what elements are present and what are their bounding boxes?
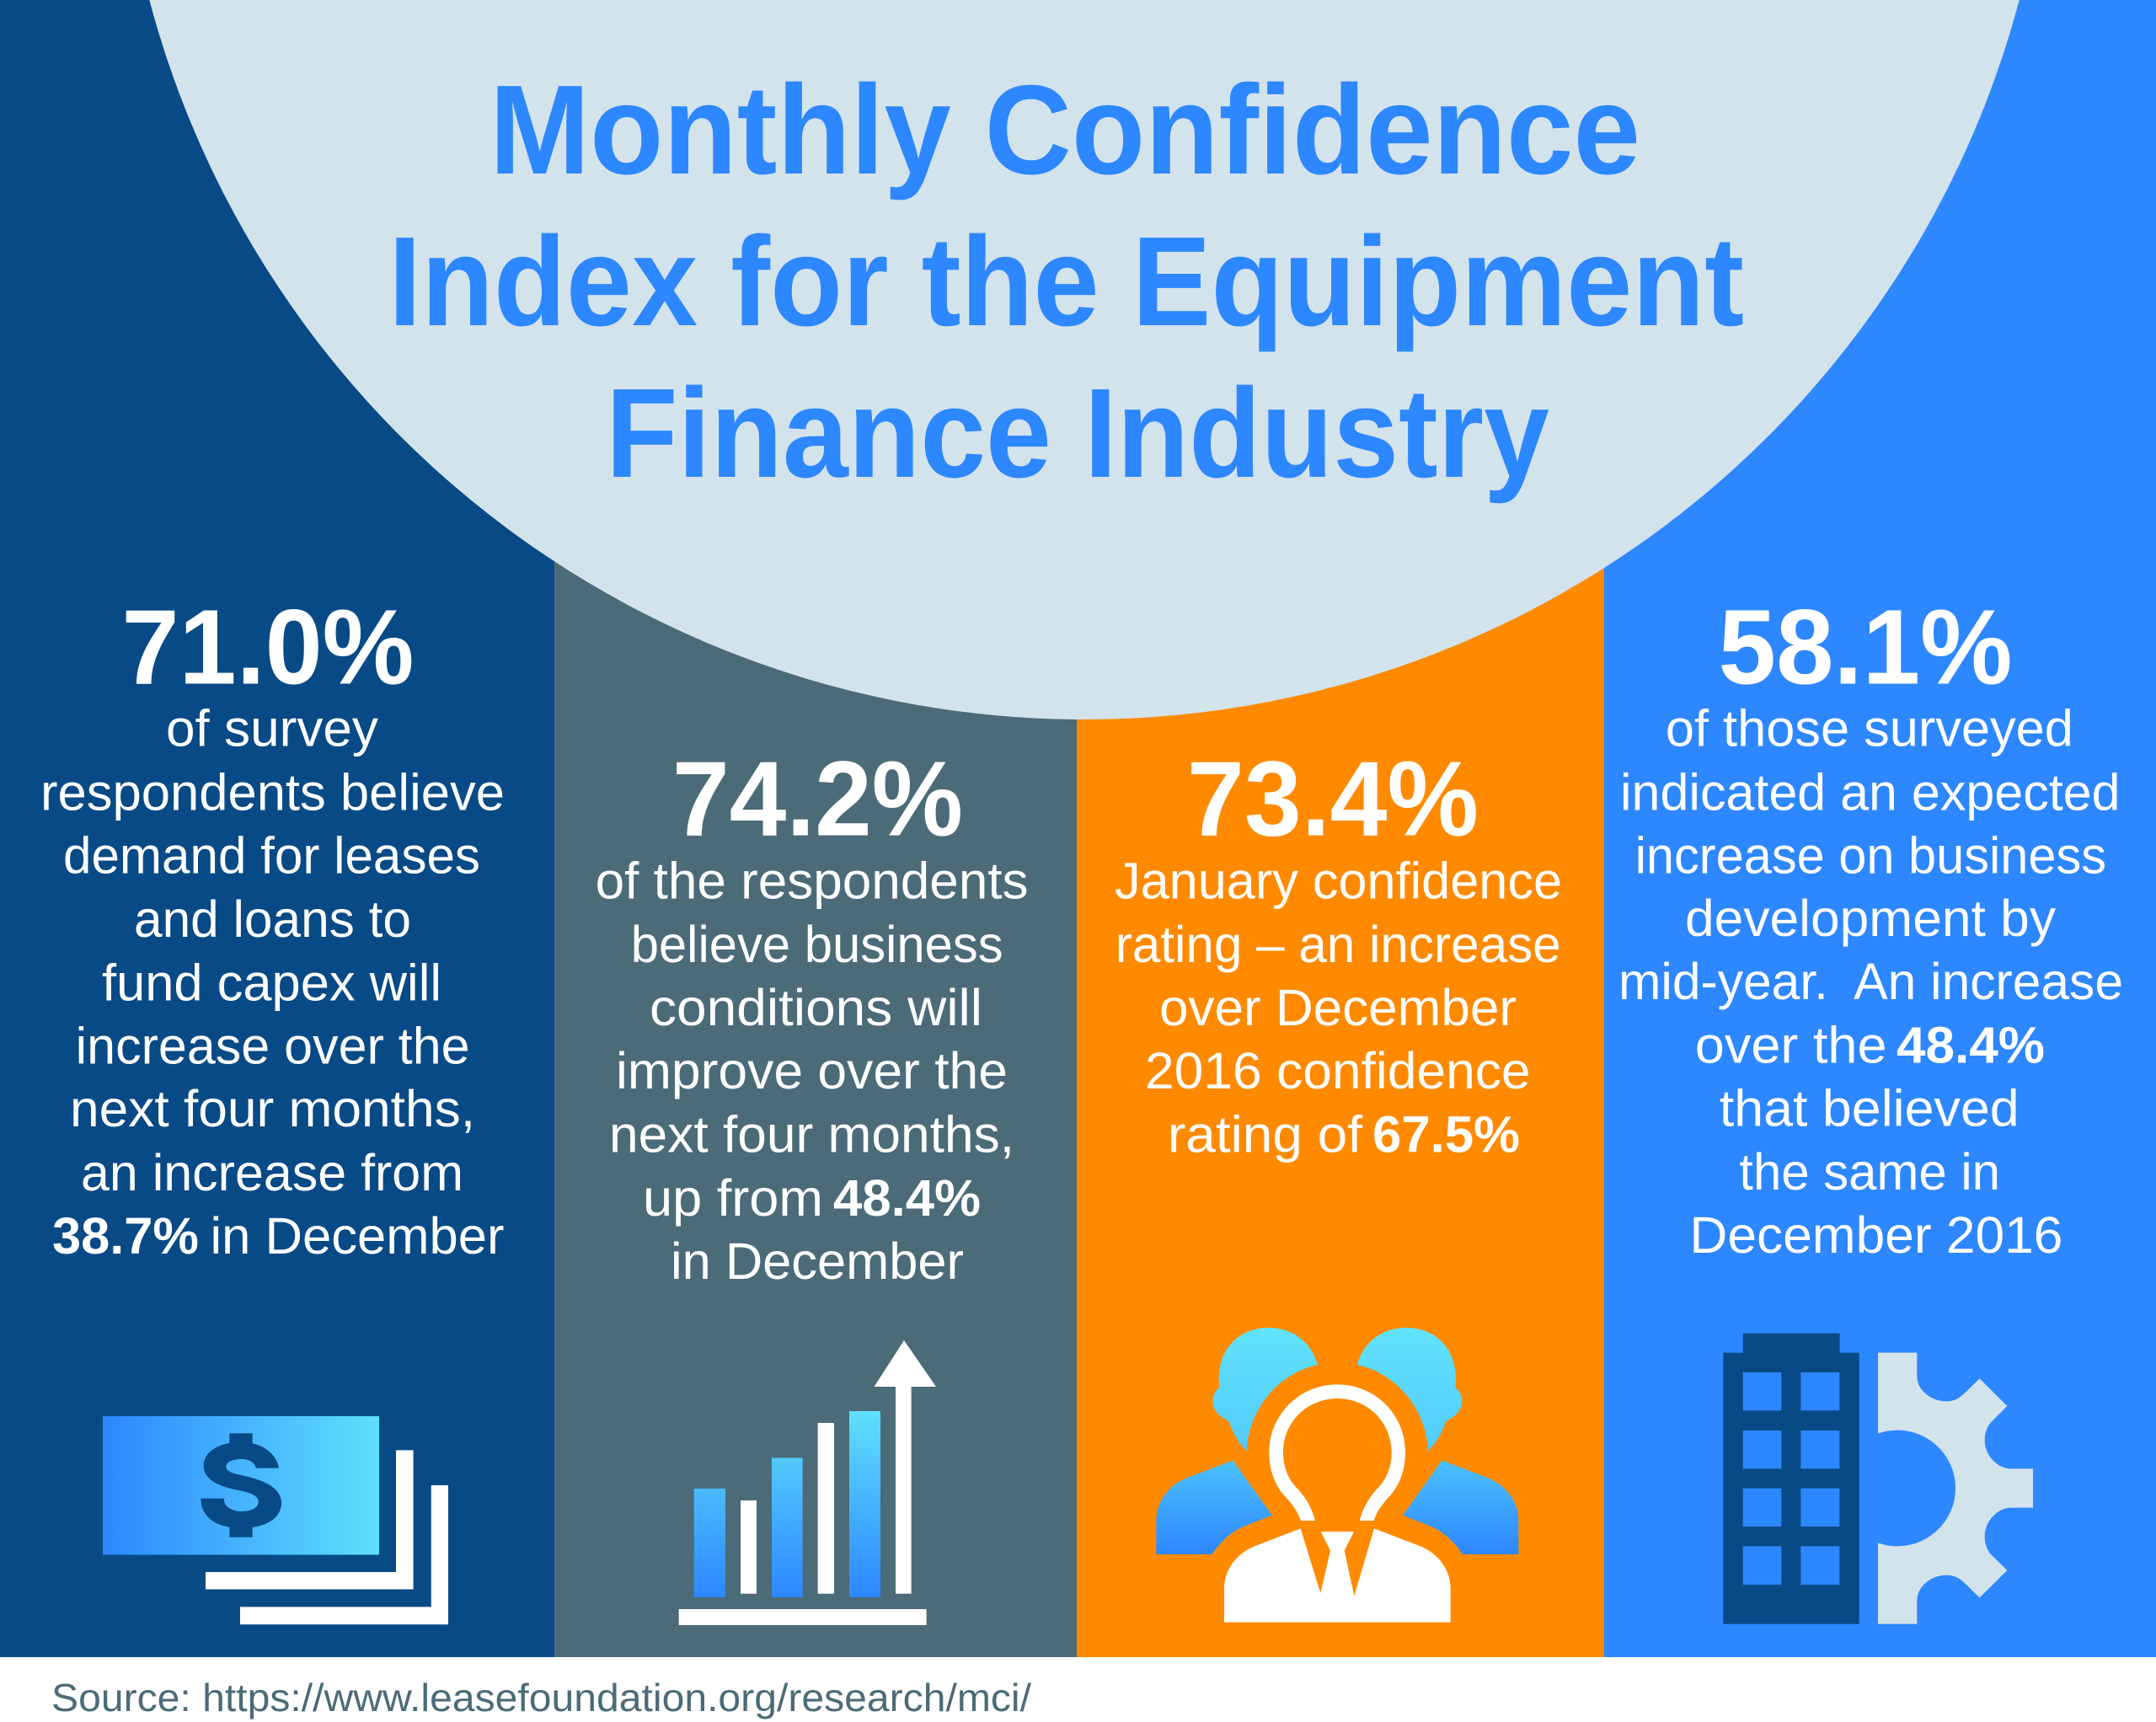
text block: business development description: that believed xyxy=(1720,1080,2020,1137)
text block: confidence rating description: 2016 confidence xyxy=(1145,1042,1531,1099)
text block: business development description: the same in xyxy=(1739,1143,2000,1201)
heading circle xyxy=(117,0,2052,719)
panel: demand for leases and loans xyxy=(0,0,554,1657)
text block: demand description: in December xyxy=(211,1207,504,1265)
text block: business development description: indicated an expected xyxy=(1620,763,2120,821)
text block: business conditions description: believe business xyxy=(631,916,1003,973)
panel: business conditions xyxy=(554,0,1077,1657)
text block: demand description: and loans to xyxy=(134,890,411,948)
text block: confidence rating description: 67.5% xyxy=(1372,1106,1520,1163)
text block: demand description: demand for leases xyxy=(63,827,480,885)
title: Finance Industry xyxy=(606,361,1549,504)
text block: confidence rating description xyxy=(1115,852,1562,1163)
panel: January confidence rating xyxy=(1077,0,1604,1657)
title xyxy=(388,58,1744,504)
text block: business conditions description: next four months, xyxy=(609,1106,1014,1163)
text block: business development description: 48.4% xyxy=(1897,1016,2045,1073)
text block: demand description: next four months, xyxy=(70,1080,475,1137)
text block: demand description: fund capex will xyxy=(102,954,441,1011)
icon: stacked dollar bills xyxy=(103,1416,448,1624)
stat: 58.1%: 58.1% xyxy=(1719,588,2012,707)
title: Monthly Confidence xyxy=(490,58,1640,201)
text block: business development description: over the xyxy=(1695,1016,1887,1073)
text block: demand description: of survey xyxy=(166,700,378,757)
text block: business development description: increase on business xyxy=(1635,827,2106,885)
text block: business development description: mid-year. An increase xyxy=(1618,953,2123,1010)
text block: confidence rating description: over December xyxy=(1159,979,1517,1036)
text block: demand description: respondents believe xyxy=(40,763,505,821)
icon: rising bar chart with arrow xyxy=(679,1340,936,1625)
text block: business conditions description: conditions will xyxy=(650,979,982,1036)
text block: demand description: increase over the xyxy=(76,1018,470,1075)
text block: confidence rating description: rating – an increase xyxy=(1115,916,1561,973)
text block: business conditions description: of the respondents xyxy=(596,852,1029,909)
stat: 71.0%: 71.0% xyxy=(121,588,415,707)
text block: business conditions description: up from xyxy=(643,1169,823,1227)
text block: business development description: of those surveyed xyxy=(1666,700,2073,757)
text block: business development description: development by xyxy=(1685,890,2057,947)
text block: demand description: an increase from xyxy=(81,1144,463,1201)
text block: demand description xyxy=(40,700,505,1265)
title: Index for the Equipment xyxy=(388,210,1744,352)
text block: business conditions description xyxy=(596,852,1029,1290)
stat: 73.4%: 73.4% xyxy=(1187,740,1479,858)
text block: confidence rating description: January confidence xyxy=(1115,852,1562,909)
text block: business development description: December 2016 xyxy=(1689,1206,2062,1264)
text block: demand description: 38.7% xyxy=(52,1207,199,1265)
text block: confidence rating description: rating of xyxy=(1168,1106,1363,1163)
icon: team with lightbulb head xyxy=(1156,1328,1518,1623)
text block: business conditions description: 48.4% xyxy=(833,1169,981,1227)
source note: Source: https://www.leasefoundation.org/research/mci/ xyxy=(51,1676,1031,1719)
icon: office building and gear xyxy=(1723,1334,2033,1624)
text block: business conditions description: in December xyxy=(671,1233,964,1290)
panel: business development xyxy=(1604,0,2156,1657)
text block: business development description xyxy=(1618,700,2123,1264)
text block: business conditions description: improve over the xyxy=(616,1042,1008,1099)
stat: 74.2%: 74.2% xyxy=(672,740,963,858)
